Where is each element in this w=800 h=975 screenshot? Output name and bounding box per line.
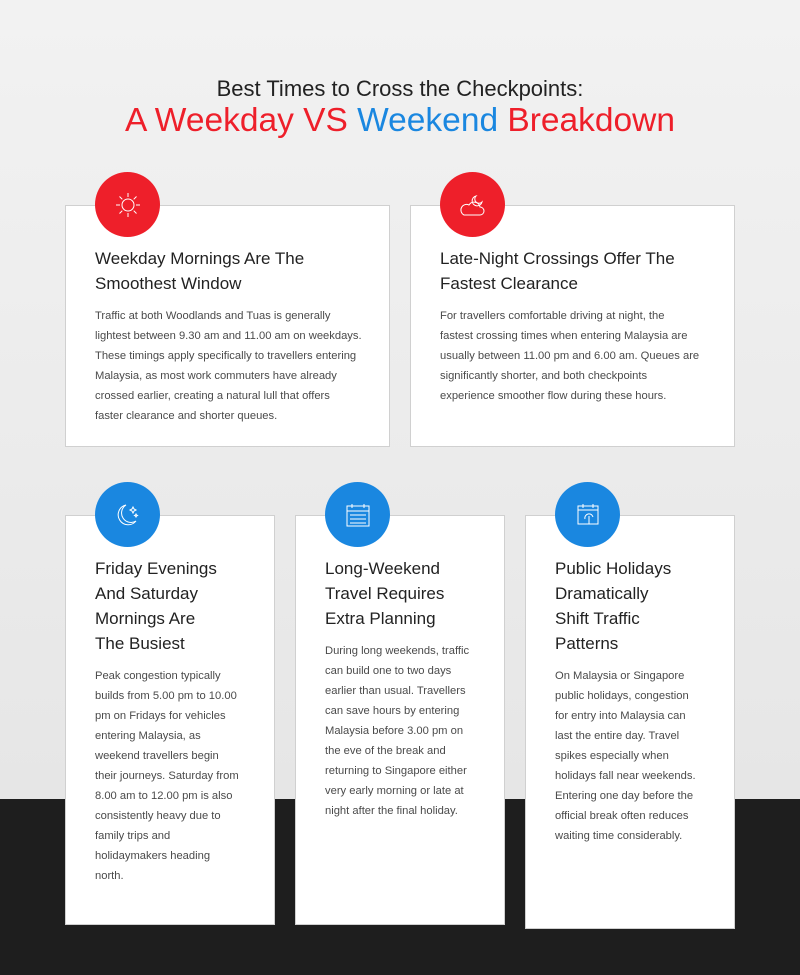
heading: long weekend: Travel Requires bbox=[325, 584, 444, 603]
panel: public holidays bbox=[525, 515, 735, 929]
text: public holidays: public holidays, congestion bbox=[555, 690, 689, 702]
text: public holidays: waiting time considerably. bbox=[555, 830, 682, 842]
text: long weekend: earlier than usual. Travellers bbox=[325, 685, 466, 697]
panel: friday evenings bbox=[65, 515, 275, 925]
text: long weekend: Malaysia before 3.00 pm on bbox=[325, 725, 463, 737]
heading: long weekend: Long-Weekend bbox=[325, 559, 440, 578]
heading: long weekend bbox=[325, 559, 444, 628]
text: friday: entering Malaysia, as bbox=[95, 730, 201, 742]
title: Best Times to Cross the Checkpoints: bbox=[217, 76, 583, 101]
text: long weekend: returning to Singapore either bbox=[325, 765, 467, 777]
text: public holidays: last the entire day. Travel bbox=[555, 730, 679, 742]
text: long weekend: very early morning or late at bbox=[325, 785, 464, 797]
heading: long weekend: Extra Planning bbox=[325, 609, 436, 628]
heading: friday: The Busiest bbox=[95, 634, 185, 653]
icon: sun bbox=[95, 172, 160, 237]
text: public holidays: spikes especially when bbox=[555, 750, 669, 762]
text: weekday mornings: lightest between 9.30 am and 11.00 am on weekdays. bbox=[95, 330, 362, 342]
text: late-night: usually between 11.00 pm and 6.00 am. Queues are bbox=[440, 350, 699, 362]
heading: late-night: Late-Night Crossings Offer The bbox=[440, 249, 675, 268]
heading: public holidays: Dramatically bbox=[555, 584, 649, 603]
text: weekday mornings: crossed earlier, creating a natural lull that offers bbox=[95, 390, 330, 402]
heading: weekday mornings: Weekday Mornings Are The bbox=[95, 249, 304, 268]
text: friday: holidaymakers heading bbox=[95, 850, 210, 862]
text: public holidays: On Malaysia or Singapore bbox=[555, 670, 684, 682]
text: public holidays: Entering one day before the bbox=[555, 790, 693, 802]
heading: public holidays bbox=[555, 559, 671, 653]
heading: public holidays: Shift Traffic bbox=[555, 609, 640, 628]
title bbox=[125, 76, 675, 139]
text: long weekend bbox=[325, 645, 469, 817]
heading: friday: Friday Evenings bbox=[95, 559, 217, 578]
text: friday: 8.00 am to 12.00 pm is also bbox=[95, 790, 232, 802]
title: A Weekday VS Weekend Breakdown bbox=[125, 102, 675, 139]
heading: friday: And Saturday bbox=[95, 584, 198, 603]
heading: friday bbox=[95, 559, 217, 653]
text: public holidays: holidays fall near weekends. bbox=[555, 770, 696, 782]
text: late-night: For travellers comfortable driving at night, the bbox=[440, 310, 664, 322]
text: long weekend: the eve of the break and bbox=[325, 745, 446, 757]
heading: weekday mornings bbox=[95, 249, 304, 293]
text: weekday mornings: Traffic at both Woodlands and Tuas is generally bbox=[95, 310, 330, 322]
heading: friday: Mornings Are bbox=[95, 609, 195, 628]
heading: weekday mornings: Smoothest Window bbox=[95, 274, 241, 293]
text: friday: consistently heavy due to bbox=[95, 810, 221, 822]
icon: calendar bbox=[325, 482, 390, 547]
text: late-night: significantly shorter, and both checkpoints bbox=[440, 370, 647, 382]
text: friday: builds from 5.00 pm to 10.00 bbox=[95, 690, 237, 702]
heading: late-night bbox=[440, 249, 675, 293]
text: long weekend: can save hours by entering bbox=[325, 705, 459, 717]
text: weekday mornings: faster clearance and shorter queues. bbox=[95, 410, 277, 422]
heading: public holidays: Public Holidays bbox=[555, 559, 671, 578]
text: friday: pm on Fridays for vehicles bbox=[95, 710, 226, 722]
text: friday: family trips and bbox=[95, 830, 170, 842]
icon: moon stars bbox=[95, 482, 160, 547]
text: weekday mornings: Malaysia, as most work commuters have already bbox=[95, 370, 337, 382]
text: friday bbox=[95, 670, 239, 882]
text: late-night: fastest crossing times when entering Malaysia are bbox=[440, 330, 687, 342]
text: public holidays: official break often reduces bbox=[555, 810, 689, 822]
panel: long weekend bbox=[295, 515, 505, 925]
text: long weekend: night after the final holiday. bbox=[325, 805, 458, 817]
text: weekday mornings: These timings apply specifically to travellers entering bbox=[95, 350, 356, 362]
text: long weekend: can build one to two days bbox=[325, 665, 451, 677]
panel: late-night crossings bbox=[410, 205, 735, 447]
text: public holidays bbox=[555, 670, 696, 842]
text: weekday mornings bbox=[95, 310, 362, 422]
text: friday: Peak congestion typically bbox=[95, 670, 221, 682]
heading: public holidays: Patterns bbox=[555, 634, 618, 653]
heading: late-night: Fastest Clearance bbox=[440, 274, 578, 293]
text: friday: north. bbox=[95, 870, 124, 882]
text: long weekend: During long weekends, traffic bbox=[325, 645, 469, 657]
text: public holidays: for entry into Malaysia can bbox=[555, 710, 686, 722]
text: late-night: experience smoother flow during these hours. bbox=[440, 390, 666, 402]
text: friday: weekend travellers begin bbox=[95, 750, 219, 762]
text: late-night bbox=[440, 310, 699, 402]
icon: holiday calendar bbox=[555, 482, 620, 547]
text: friday: their journeys. Saturday from bbox=[95, 770, 239, 782]
panel: weekday mornings bbox=[65, 205, 390, 447]
icon: cloud moon bbox=[440, 172, 505, 237]
